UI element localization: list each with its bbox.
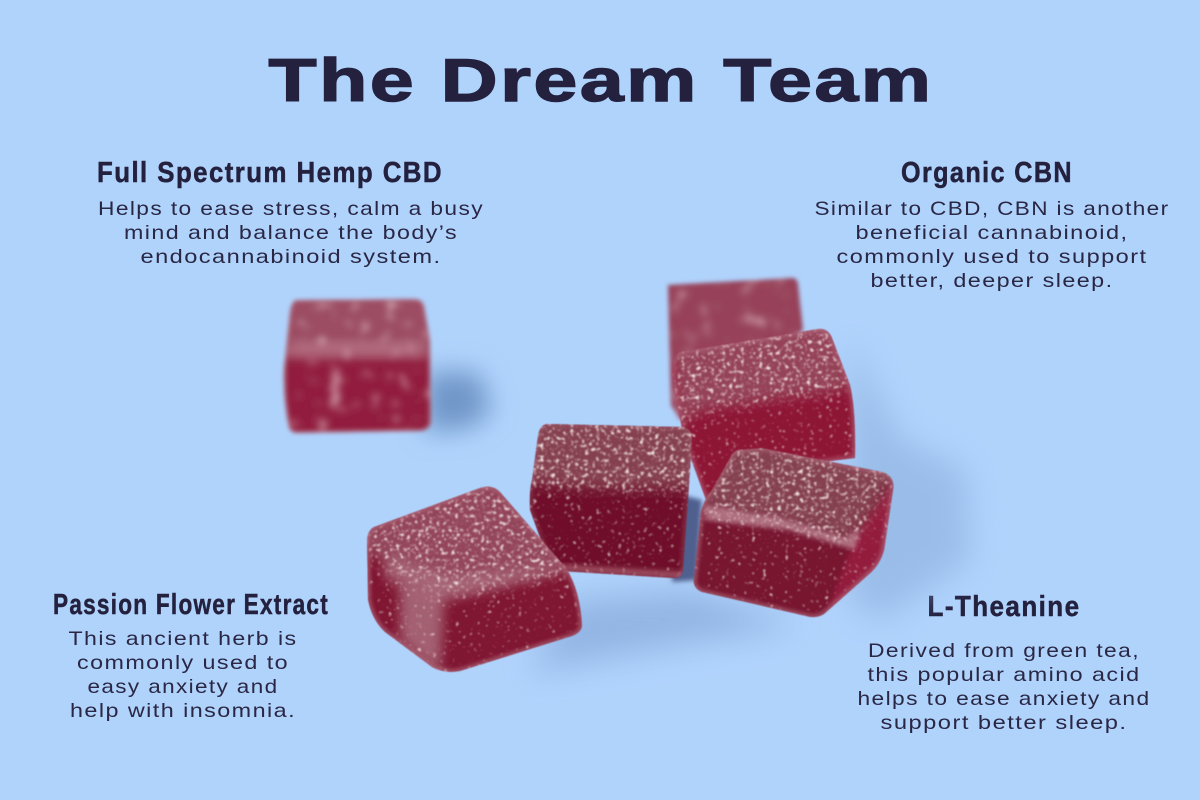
text block: Organic CBN: Similar to CBD, CBN is another — [814, 198, 1170, 220]
text block: Organic CBN — [814, 157, 1170, 292]
gummy: front left — [366, 486, 583, 673]
text block: Full Spectrum Hemp CBD: endocannabinoid system. — [140, 246, 442, 268]
text block: Organic CBN: commonly used to support — [836, 246, 1148, 268]
gummy: top left, out of focus — [280, 290, 435, 440]
gummy: upper right — [672, 328, 856, 500]
text block: Passion Flower Extract: easy anxiety and — [88, 676, 278, 698]
text block: Passion Flower Extract — [53, 589, 329, 722]
gummy: back right, out of focus — [660, 275, 810, 425]
text block: L-Theanine: helps to ease anxiety and — [858, 688, 1150, 710]
title: The Dream Team — [268, 47, 934, 114]
text block: L-Theanine: this popular amino acid — [868, 664, 1140, 686]
text block: Full Spectrum Hemp CBD: Helps to ease stress, calm a busy — [98, 198, 484, 220]
text block: Passion Flower Extract: This ancient herb is — [68, 628, 298, 650]
gummy: centre — [528, 423, 692, 579]
text block: Passion Flower Extract: commonly used to — [77, 652, 289, 674]
text block: Full Spectrum Hemp CBD: Full Spectrum Hemp CBD — [97, 157, 443, 189]
text block: Organic CBN: Organic CBN — [901, 157, 1073, 189]
shadows under gummies — [425, 340, 970, 672]
text block: Organic CBN: beneficial cannabinoid, — [856, 222, 1128, 244]
gummy: lower right — [693, 447, 894, 618]
text block: L-Theanine — [858, 591, 1150, 734]
text block: Passion Flower Extract: Passion Flower Extract — [53, 589, 329, 621]
text block: Passion Flower Extract: help with insomnia. — [70, 700, 296, 722]
text block: L-Theanine: L-Theanine — [928, 591, 1080, 623]
text block: Organic CBN: better, deeper sleep. — [870, 270, 1114, 292]
text block: Full Spectrum Hemp CBD: mind and balance the body’s — [124, 222, 458, 244]
text block: L-Theanine: Derived from green tea, — [868, 640, 1140, 662]
photo: gummies — [280, 275, 970, 677]
text block: L-Theanine: support better sleep. — [880, 712, 1128, 734]
text block: Full Spectrum Hemp CBD — [97, 157, 484, 268]
